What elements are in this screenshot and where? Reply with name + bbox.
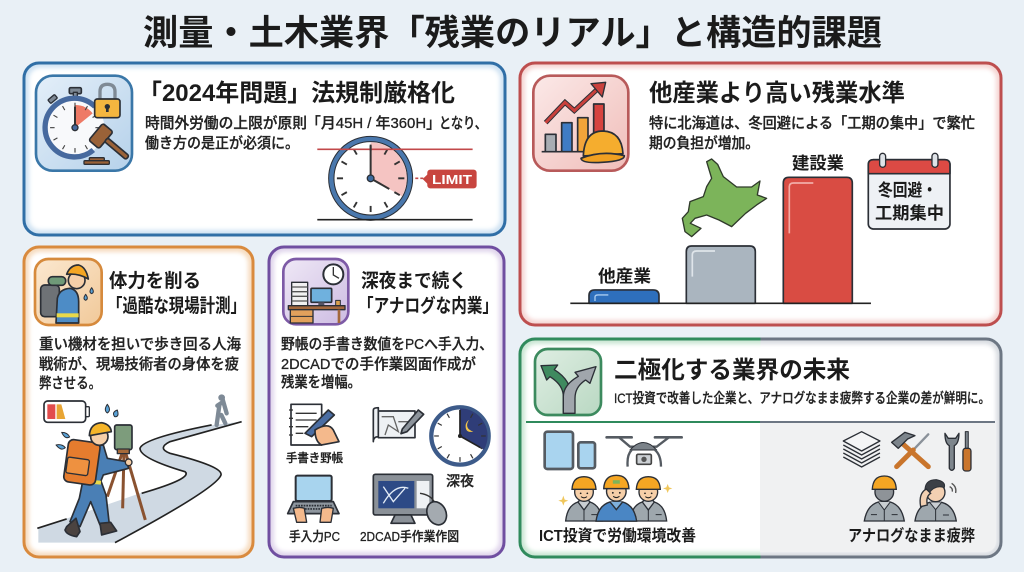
panel: polarized future [520,339,1001,557]
icon: tired worker with backpack [35,259,102,325]
calendar text [875,181,944,223]
text block: 弊させる。 [39,375,101,392]
panel: 2024 problem [24,63,505,235]
icon: stopwatch, lock and gavel [36,76,134,171]
icon: CAD monitor [360,474,459,544]
label: analog exhaustion: アナログなまま疲弊 [848,526,975,545]
heading: 「過酷な現場計測」 [107,294,246,317]
bars and axis [570,177,871,303]
icons: happy workers [558,475,672,521]
label: LIMIT: LIMIT [432,172,472,187]
text block: 働き方の是正が必須に。 [145,134,299,152]
label: 深夜 [446,473,474,489]
text block [281,336,493,391]
icon: blueprint and pen [373,408,424,442]
icon: night clock [431,407,489,489]
label: 手書き野帳 [286,450,343,465]
panel: physical field survey [24,247,253,557]
text block: 2DCADでの手作業図面作成が [281,355,476,373]
heading: 「2024年問題」法規制厳格化 [138,80,455,107]
text block: 「月45H / 年360H」 [306,115,441,132]
heading: 体力を削る [109,270,201,292]
heading: 「アナログな内業」 [358,294,498,317]
text block: となり、 [439,115,487,132]
text block: 戦術が、現場技術者の身体を疲 [39,355,239,373]
title: 測量・土木業界「残業のリアル」と構造的課題 [143,14,882,53]
label: 手入力PC [289,529,340,544]
heading [107,270,246,317]
chart: clock with limit [317,139,477,220]
icon: Hokkaido map [682,159,767,237]
calendar text: 工期集中 [875,204,944,223]
text block [145,114,487,152]
label: construction: 建設業 [792,154,844,173]
icons: paper stack and tools [843,432,971,471]
icon: handwritten notebook [286,404,343,465]
icons: tablet, phone and drone [545,432,682,469]
bar chart [570,154,871,303]
icon: calendar [868,153,950,229]
panel: higher overtime level [520,63,1001,325]
text block: 期の負担が増加。 [649,134,759,152]
icon: rising chart and helmet [533,76,628,171]
panel: analog office work [269,247,504,557]
text block: 特に北海道は、冬回避による「工期の集中」で繁忙 [649,115,975,132]
text block: 残業を増幅。 [281,373,361,391]
label: ICT improvement: ICT投資で労働環境改善 [539,526,696,545]
heading: 深夜まで続く [361,270,467,292]
heading [358,270,498,317]
text block: 野帳の手書き数値をPCへ手入力、 [281,336,493,353]
icons: exhausted workers [864,476,956,521]
divider [526,421,995,423]
heading: 他産業より高い残業水準 [649,79,905,107]
label: 2DCAD手作業作図 [360,529,459,544]
calendar text: 冬回避・ [878,181,937,200]
icon: forked road arrows [535,349,601,415]
heading: 二極化する業界の未来 [614,357,850,384]
text block [649,115,975,152]
text block: 時間外労働の上限が原則 [145,114,307,132]
text block [39,336,241,392]
icon: desk at night [283,259,348,324]
icon: laptop typing [288,476,340,544]
illustration: surveyor on winding road [37,394,242,543]
text block: 重い機材を担いで歩き回る人海 [39,336,241,353]
label: other industries: 他産業 [598,267,651,286]
